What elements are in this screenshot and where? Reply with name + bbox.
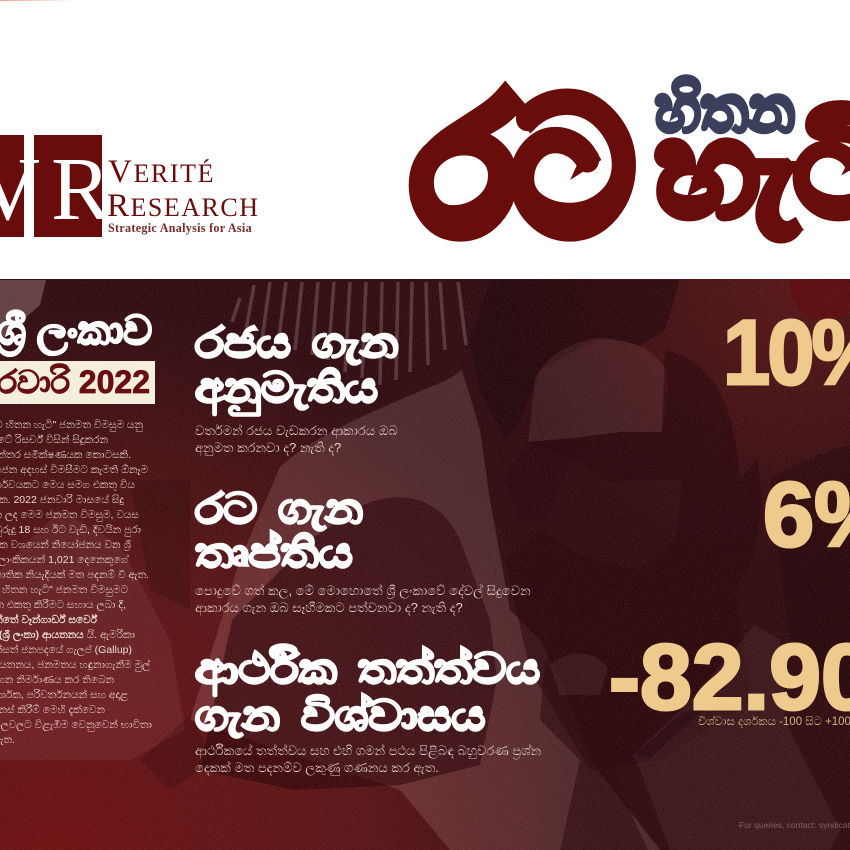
photo: lower-right pale shape xyxy=(633,625,840,850)
title: rata hithana hati xyxy=(408,67,850,260)
section: government approval xyxy=(194,302,850,456)
heading line 2: තෘප්තිය xyxy=(195,529,353,576)
body text: (ශ්‍රී ලංකා) ආයතනය යි. ඇමරිකා xyxy=(0,629,135,641)
question: අනුමත කරනවා ද? නැති ද? xyxy=(195,440,341,455)
photo: striped cloth xyxy=(232,282,466,385)
logo wordmark: Research: RESEARCH xyxy=(107,188,259,224)
logo tagline: Strategic Analysis for Asia xyxy=(108,221,252,235)
body text: ලාංකිකයන් 1,021 දෙනෙකුගේ xyxy=(0,554,128,566)
question: වර්තමන් රජය වැඩකරන ආකාරය ඔබ xyxy=(195,423,398,438)
date banner xyxy=(0,361,155,404)
logo mark xyxy=(0,135,108,237)
top accent xyxy=(0,0,75,1)
logo wordmark: Verité: VERITÉ xyxy=(108,154,215,190)
photo: man's face xyxy=(470,250,850,770)
section: economic confidence xyxy=(194,625,850,776)
background panel with photo montage xyxy=(0,279,850,850)
heading: ආර්ථික තත්ත්වය xyxy=(195,645,540,692)
logo: Verité Research xyxy=(0,135,259,237)
photo: shirt and shoulder xyxy=(190,370,660,850)
photo: microphone xyxy=(540,647,648,850)
question: ආකාරය ගැන ඔබ සෑහීමකට පත්වනවා ද? නැති ද? xyxy=(195,600,463,615)
section: satisfaction xyxy=(194,464,850,616)
heading: රට ගැන xyxy=(195,485,363,532)
question: ආර්ථිකයේ තත්ත්වය සහ එහි ගමන් පථය පිළිබඳ බහුවරණ ප්‍රශ්න xyxy=(195,743,541,758)
heading: Sri Lanka: ශ්‍රී ලංකාව xyxy=(0,309,152,353)
question xyxy=(195,743,541,776)
question: දෙකක් මත පදනම්ව ලකුණු ගණනය කර ඇත. xyxy=(195,760,439,775)
question xyxy=(195,583,530,616)
heading line 2: ගැන විශ්වාසය xyxy=(195,692,485,739)
heading: රජය ගැන xyxy=(195,319,399,366)
question: පොදුවේ ගත් කල, මේ මොහොතේ ශ්‍රී ලංකාවේ දේවල් සිදුවෙන xyxy=(195,583,530,598)
photo: left figures xyxy=(0,280,215,790)
question xyxy=(195,423,398,456)
title word: hithana: හිතන xyxy=(655,73,795,146)
body text xyxy=(0,419,152,746)
heading line 2: අනුමැතිය xyxy=(195,364,378,411)
